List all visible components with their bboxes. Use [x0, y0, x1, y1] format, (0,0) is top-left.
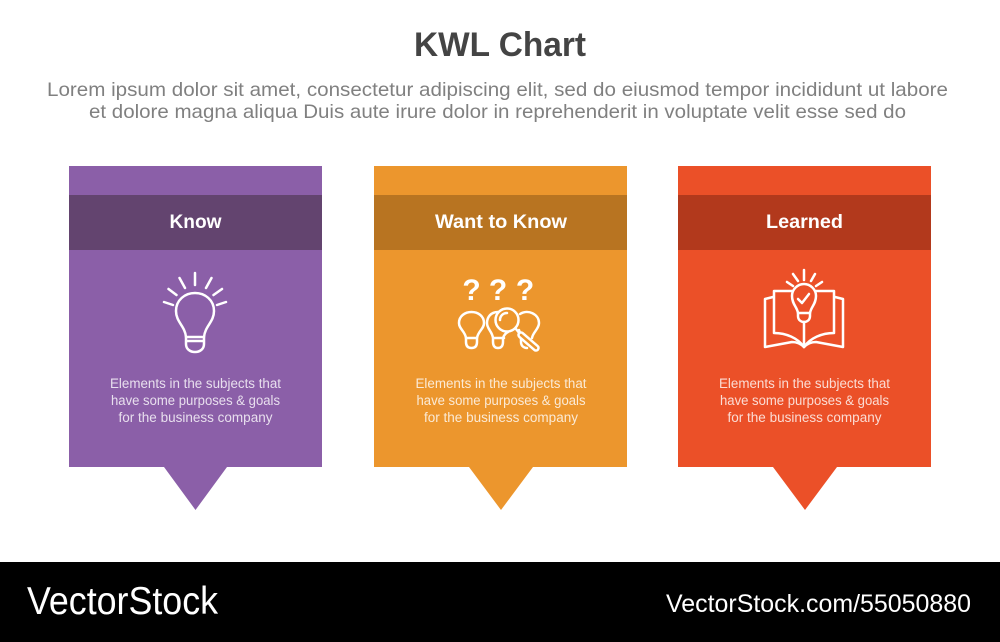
description: Know: Elements in the subjects that — [110, 376, 281, 391]
heading: Know: Know — [170, 212, 222, 233]
intro paragraph: et dolore magna aliqua Duis aute irure dolor in reprehenderit in voluptate velit esse sed do — [89, 101, 906, 123]
description: Know: for the business company — [118, 410, 273, 425]
intro paragraph — [47, 79, 948, 123]
footer image reference: VectorStock.com/55050880 — [666, 590, 971, 618]
description: Know — [110, 376, 281, 425]
heading: Want to Know: Want to Know — [435, 212, 567, 233]
icon: book with bulb — [765, 270, 843, 347]
icon: question marks, bulbs and magnifier — [459, 274, 539, 348]
header band: Know — [69, 195, 322, 250]
panel: Learned — [678, 166, 931, 510]
question marks: ? — [516, 274, 534, 307]
panel: Know — [69, 166, 322, 510]
description: Know: have some purposes & goals — [111, 393, 280, 408]
panel: Want to Know — [374, 166, 627, 510]
description: Want to Know: have some purposes & goals — [416, 393, 586, 408]
header band: Learned — [678, 195, 931, 250]
card body: Learned — [678, 166, 931, 510]
icon: light bulb — [164, 273, 226, 352]
card body: Want to Know — [374, 166, 627, 510]
intro paragraph: Lorem ipsum dolor sit amet, consectetur adipiscing elit, sed do eiusmod tempor incididunt ut labore — [47, 79, 948, 101]
description: Learned: have some purposes & goals — [720, 393, 889, 408]
footer bar — [0, 562, 1000, 642]
title: KWL Chart — [414, 26, 586, 64]
bulbs and magnifier — [459, 308, 539, 348]
footer logo text: VectorStock — [27, 580, 218, 623]
question marks: ? — [489, 274, 507, 307]
heading: Learned: Learned — [766, 212, 843, 233]
description: Learned: Elements in the subjects that — [719, 376, 890, 391]
header band: Want to Know — [374, 195, 627, 250]
description: Learned — [719, 376, 890, 425]
description: Want to Know: Elements in the subjects that — [416, 376, 587, 391]
card body: Know — [69, 166, 322, 510]
description: Learned: for the business company — [728, 410, 882, 425]
description: Want to Know: for the business company — [424, 410, 578, 425]
question marks: ? — [462, 274, 481, 307]
description: Want to Know — [416, 376, 587, 425]
question marks — [462, 274, 534, 307]
